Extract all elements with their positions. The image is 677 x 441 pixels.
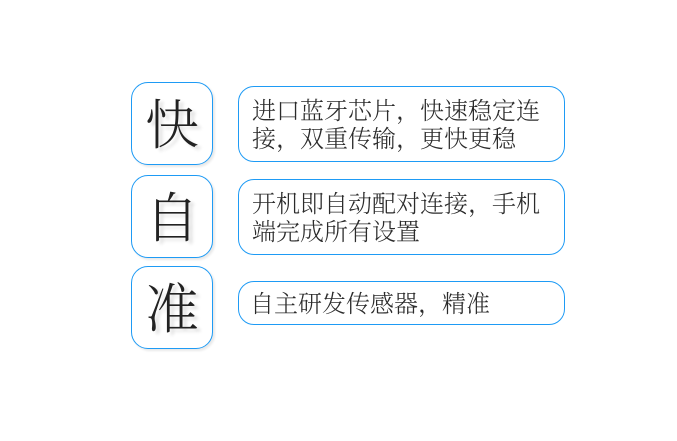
text panel: automatic pairing: 开机即自动配对连接，手机 bbox=[252, 192, 540, 218]
text panel: fast connection bbox=[238, 86, 565, 162]
text panel: fast connection: 进口蓝牙芯片，快速稳定连 bbox=[252, 99, 540, 125]
text panel: accurate sensor bbox=[238, 281, 565, 325]
icon tile: 自 bbox=[131, 175, 213, 258]
text panel: fast connection: 接，双重传输，更快更稳 bbox=[252, 127, 516, 153]
icon tile: 快 bbox=[131, 82, 213, 165]
text panel: automatic pairing bbox=[238, 179, 565, 255]
icon tile: 快: 快 bbox=[145, 96, 199, 156]
icon tile: 准 bbox=[131, 266, 213, 349]
icon tile: 准: 准 bbox=[145, 280, 199, 340]
text panel: automatic pairing: 端完成所有设置 bbox=[252, 220, 420, 246]
text panel: accurate sensor: 自主研发传感器，精准 bbox=[250, 292, 490, 318]
icon tile: 自: 自 bbox=[145, 189, 199, 249]
